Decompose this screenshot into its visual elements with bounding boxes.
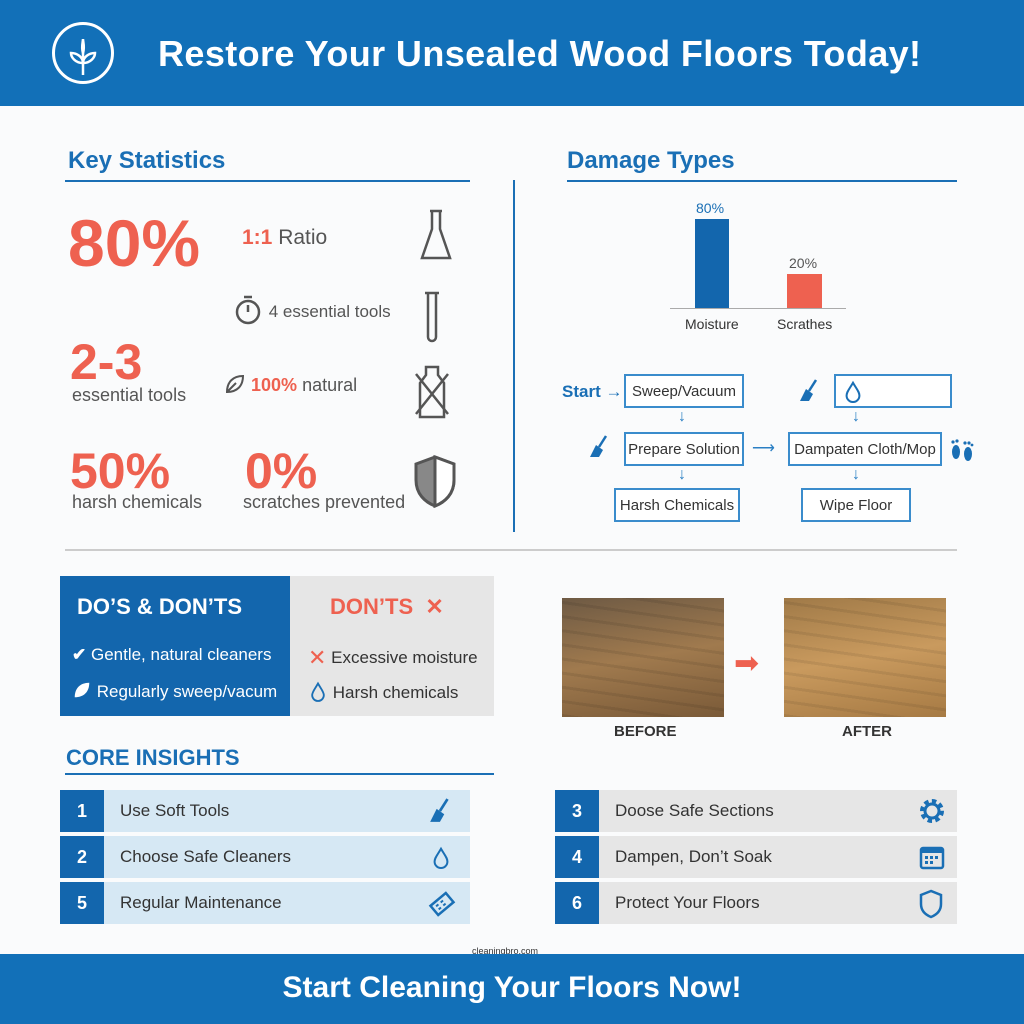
stat 4 essential tools: 4 essential tools [269,302,391,321]
stat 100% natural: 100% natural [251,375,357,395]
flowchart: Wipe Floor [820,496,892,514]
text: Dampen, Don’t Soak [615,847,772,866]
heading: key statistics: Key Statistics [68,147,225,174]
flowchart: ↓ [678,408,686,425]
flowchart: Sweep/Vacuum [632,382,736,400]
icon: flask [420,210,452,260]
flowchart: Harsh Chemicals [620,496,734,514]
title: Restore Your Unsealed Wood Floors Today! [158,33,921,74]
stat 50%: 50% [70,443,170,499]
before/after images [562,598,946,740]
text: Protect Your Floors [615,893,760,912]
panel: do's and don'ts: DO’S & DON’TS [77,594,242,619]
footer banner [0,954,1024,1024]
text: 2 [77,846,87,866]
text: 6 [572,892,582,912]
insights right: Doose Safe Sections [615,801,774,820]
text: scratches prevented [243,492,405,512]
panel: do's and don'ts: ✕ Excessive moisture [308,645,478,670]
before/after images: AFTER [842,723,892,740]
flowchart: ↓ [852,408,860,425]
flowchart [562,374,974,522]
stat 0%: 0% [245,443,317,499]
flowchart: Prepare Solution [628,440,740,458]
text: harsh chemicals [72,492,202,512]
text: Choose Safe Cleaners [120,847,291,866]
panel: do's and don'ts: ✔ Gentle, natural cleaners [72,645,271,664]
insights right [555,790,957,832]
stat 4 essential tools [236,296,391,324]
before/after images: ➡ [734,647,759,680]
bar chart: 80% [696,200,724,216]
icon: leaf circle [52,22,114,84]
header banner [0,0,1024,106]
source: cleaningbro.com [472,946,538,956]
bar chart: Scrathes [777,316,832,332]
text: essential tools [72,385,186,405]
before/after images: BEFORE [614,723,677,740]
heading: damage types: Damage Types [567,147,735,174]
insights left [60,790,470,832]
panel: do's and don'ts: Harsh chemicals [333,683,458,702]
panel: do's and don'ts [60,576,494,716]
panel: do's and don'ts: DON’TS ✕ [330,594,444,619]
footer banner: Start Cleaning Your Floors Now! [283,971,741,1004]
icon: test tube [425,292,439,342]
text: 5 [77,892,87,912]
stat 80%: 80% [68,206,200,280]
icon: shield [414,454,456,508]
insights right: 3 [572,800,582,820]
flowchart: Dampaten Cloth/Mop [794,440,936,458]
flowchart: Start → [562,382,622,401]
text: 4 [572,846,582,866]
stat 2-3: 2-3 [70,334,142,390]
icon: crossed bottle [415,366,449,418]
insights left: 1 [77,800,87,820]
insights left: Use Soft Tools [120,801,229,820]
bar chart: 20% [789,255,817,271]
flowchart: ⟶ [752,440,775,457]
flowchart: ↓ [678,466,686,483]
text: Regular Maintenance [120,893,282,912]
bar chart [670,200,846,332]
flowchart: ↓ [852,466,860,483]
panel: do's and don'ts: Regularly sweep/vacum [97,682,277,701]
bar chart: Moisture [685,316,739,332]
stat 1:1 ratio: 1:1 Ratio [242,226,327,249]
heading: core insights: CORE INSIGHTS [66,745,240,770]
